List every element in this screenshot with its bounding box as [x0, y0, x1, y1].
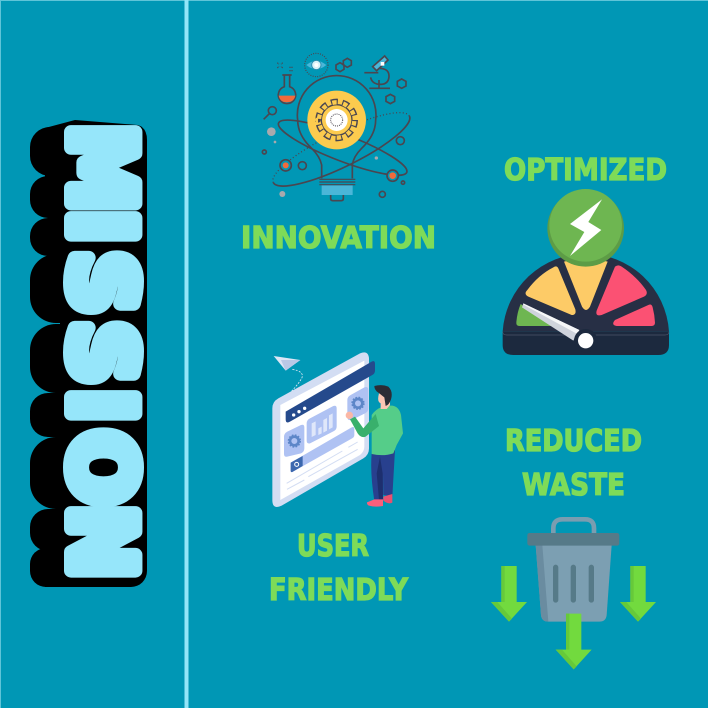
arm	[350, 414, 379, 437]
label: friendly: FRIENDLY	[269, 573, 409, 608]
paper plane	[274, 356, 302, 395]
label: user: USER	[297, 529, 369, 564]
gear card right	[347, 387, 368, 420]
label: reduced: REDUCED	[505, 424, 642, 459]
small outlined circles	[262, 137, 405, 197]
can body	[536, 545, 612, 622]
shoes	[367, 499, 383, 507]
orbit two dotted half	[273, 113, 409, 183]
needle	[522, 303, 579, 341]
bulb glass outline	[297, 76, 376, 178]
browser window white	[280, 361, 364, 500]
yellow segments	[526, 266, 576, 315]
arrow right	[620, 566, 656, 622]
text lines	[287, 442, 358, 489]
arrow left	[491, 566, 527, 622]
browser title bar	[286, 361, 375, 422]
can handle	[553, 519, 594, 535]
red segments	[596, 265, 647, 315]
title letters: MISSION	[50, 124, 153, 579]
icon: trash can with arrows	[491, 519, 656, 669]
gear card left	[284, 425, 304, 457]
hair	[374, 385, 392, 406]
vertical divider line	[184, 0, 188, 708]
magnifier	[264, 107, 276, 119]
yellow core circle	[307, 91, 366, 149]
label: innovation: INNOVATION	[241, 221, 436, 256]
browser window back	[272, 352, 369, 507]
hand	[346, 412, 353, 419]
icon: speed gauge	[503, 189, 669, 355]
can slots	[553, 565, 594, 603]
orbit one	[274, 111, 412, 185]
gauge dial	[503, 254, 669, 332]
title extrusion shadow	[30, 120, 147, 587]
gear	[318, 101, 355, 139]
flask	[278, 75, 296, 104]
right hexagons	[386, 79, 406, 104]
orbit two solid half	[273, 116, 410, 186]
icon: user at web interface	[272, 352, 403, 507]
needle hub	[574, 329, 597, 352]
lightning bolt	[570, 199, 602, 256]
eye icon	[305, 53, 328, 77]
search bar	[291, 427, 354, 472]
label: waste: WASTE	[522, 468, 625, 503]
torso	[372, 406, 403, 455]
label: optimized: OPTIMIZED	[504, 153, 667, 188]
arrow bottom	[556, 614, 592, 669]
gauge base	[503, 332, 669, 355]
person	[346, 385, 403, 507]
orange planet left	[280, 160, 291, 171]
head	[378, 393, 390, 409]
chart card	[307, 406, 337, 443]
sparkle marks	[277, 63, 293, 71]
title: MISSION rotated bubble text	[30, 120, 153, 587]
icon: innovation light bulb	[262, 53, 412, 201]
legs	[371, 450, 395, 501]
orange planet right	[387, 170, 398, 181]
molecule hexagons	[336, 58, 351, 72]
grey dots	[267, 127, 378, 197]
can lid	[527, 533, 619, 546]
microscope	[364, 56, 390, 88]
green segment	[516, 304, 553, 326]
green circle badge	[547, 190, 624, 267]
bulb base	[319, 179, 355, 201]
